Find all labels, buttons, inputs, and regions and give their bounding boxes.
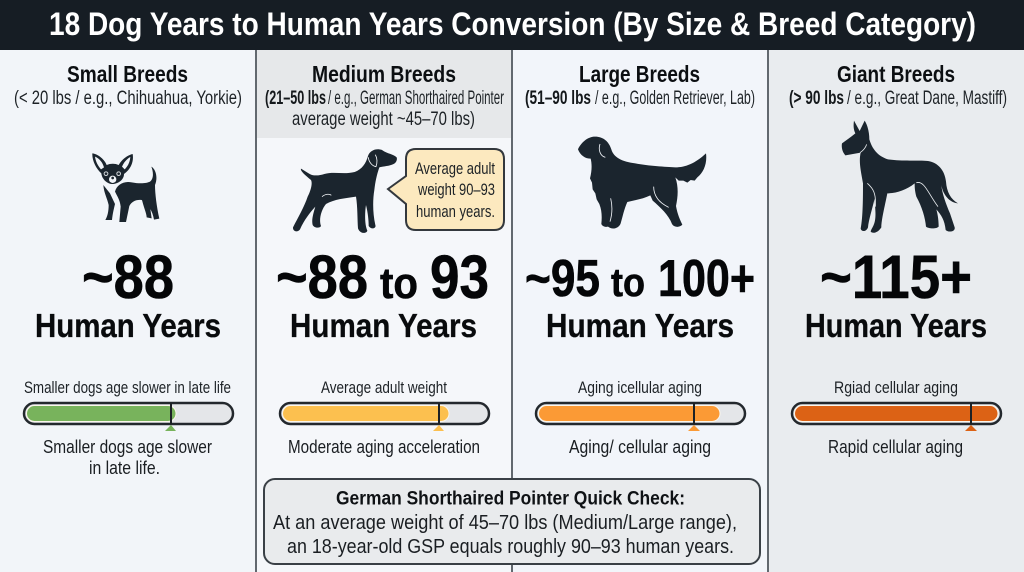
big number: small breeds: ~88 — [82, 243, 174, 311]
big number: medium breeds — [276, 243, 489, 311]
unit: large breeds: Human Years — [546, 307, 734, 344]
icon: pointer silhouette — [293, 149, 397, 233]
callout: average adult weight: weight 90–93 — [417, 181, 495, 199]
big number: medium breeds: 93 — [430, 243, 489, 311]
callout: german shorthaired pointer quick check — [264, 479, 760, 564]
heading: giant breeds: Giant Breeds — [837, 61, 955, 87]
description line two: small breeds: in late life. — [89, 457, 160, 478]
aging bar: medium breeds — [280, 403, 489, 431]
big number: large breeds: ~95 — [525, 250, 600, 308]
weight range: medium breeds — [265, 88, 504, 130]
big number: medium breeds: ~88 — [276, 243, 368, 311]
bar label: small breeds: Smaller dogs age slower in late life — [24, 379, 231, 397]
weight range: giant breeds: (> 90 lbs — [789, 88, 844, 109]
weight range: medium breeds: (21–50 lbs — [265, 88, 326, 109]
big number: large breeds: 100+ — [658, 250, 755, 308]
quick check heading: German Shorthaired Pointer Quick Check: — [336, 488, 685, 510]
description: giant breeds: Rapid cellular aging — [828, 436, 963, 457]
big number: medium breeds: to — [380, 259, 418, 308]
icon: great dane silhouette — [842, 121, 958, 233]
weight range: small breeds: (< 20 lbs / e.g., Chihuahua, Yorkie) — [14, 88, 242, 109]
callout: average adult weight: Average adult — [415, 160, 495, 178]
unit: medium breeds: Human Years — [290, 307, 477, 344]
weight range: large breeds — [525, 88, 755, 109]
weight range: giant breeds — [789, 88, 1007, 109]
description: small breeds: Smaller dogs age slower — [43, 436, 212, 457]
panel: medium breeds — [256, 50, 512, 572]
bar label: medium breeds: Average adult weight — [321, 379, 447, 397]
callout: average adult weight — [388, 149, 504, 230]
bar label: large breeds: Aging icellular aging — [578, 379, 702, 397]
icon: golden retriever silhouette — [578, 137, 706, 228]
icon: chihuahua silhouette — [92, 153, 159, 222]
panel: large breeds — [512, 50, 768, 572]
heading: small breeds: Small Breeds — [67, 61, 188, 87]
aging bar: giant breeds — [792, 403, 1001, 431]
weight range: large breeds: (51–90 lbs — [525, 88, 591, 109]
quick check body line two: an 18-year-old GSP equals roughly 90–93 human years. — [287, 536, 734, 558]
quick check body line one: At an average weight of 45–70 lbs (Medium/Large range), — [273, 512, 737, 534]
big number: large breeds: to — [611, 261, 645, 305]
header bar — [0, 0, 1024, 50]
weight range: medium breeds: average weight ~45–70 lbs) — [292, 109, 475, 130]
heading: large breeds: Large Breeds — [579, 61, 700, 87]
weight range: medium breeds: / e.g., German Shorthaired Pointer — [328, 88, 504, 109]
unit: small breeds: Human Years — [35, 307, 221, 344]
big number: giant breeds: ~115+ — [820, 243, 972, 311]
description: medium breeds: Moderate aging acceleration — [288, 436, 480, 457]
description: large breeds: Aging/ cellular aging — [569, 436, 711, 457]
heading: medium breeds: Medium Breeds — [312, 61, 456, 87]
panel: small breeds — [0, 50, 256, 572]
panel: giant breeds — [768, 50, 1024, 572]
big number: large breeds — [525, 250, 755, 308]
aging bar: large breeds — [536, 403, 745, 431]
unit: giant breeds: Human Years — [805, 307, 987, 344]
aging bar: small breeds — [24, 403, 233, 431]
bar label: giant breeds: Rgiad cellular aging — [834, 379, 958, 397]
callout: average adult weight: human years. — [416, 203, 495, 221]
weight range: large breeds: / e.g., Golden Retriever, Lab) — [595, 88, 755, 109]
